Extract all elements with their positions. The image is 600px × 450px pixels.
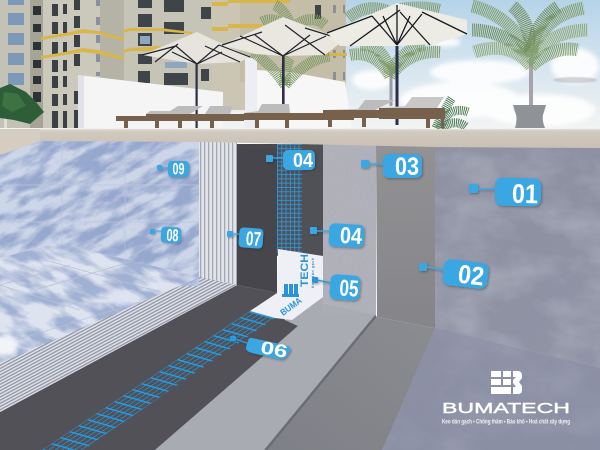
palm trees behind terrace [252,5,468,128]
callout 07: 07 [245,228,262,251]
umbrella left [142,32,250,128]
coping stone [0,129,600,155]
callout 09: 09 [172,160,184,178]
callout 05: 05 [339,274,360,302]
tile adhesive ribs: floor [0,277,237,412]
callout 01 [469,177,541,209]
white terrace walls [78,58,352,128]
callout 09 [157,160,189,178]
white membrane with brand print [250,249,323,320]
callout 01: 01 [512,179,538,209]
tile adhesive ribs: wall [199,142,237,285]
callout 05 [312,274,361,302]
callout 07 [227,227,264,251]
bush [436,98,468,128]
yellow balcony bands [41,0,347,60]
brand icon [282,284,299,297]
callout 08 [150,226,181,245]
logo icon [491,371,522,394]
callout 06 [230,336,290,362]
marble tile wall [0,141,199,286]
left tree [0,84,44,128]
umbrella middle [222,17,344,112]
callout 04 upper [266,150,315,172]
layer 01: concrete wall and floor [380,146,600,450]
white membrane with brand print: BUMA [278,295,304,318]
wall mesh [277,144,302,252]
Bumatech logo [442,371,570,426]
floor mesh [42,311,275,450]
callout 04 lower [310,222,365,249]
sun loungers [116,97,445,128]
umbrella right [327,3,467,125]
callout 06: 06 [259,337,289,362]
callout 02 [419,258,489,291]
logo wordmark: BUMATECH [442,400,570,417]
sky with clouds [0,0,600,130]
callout 08: 08 [166,226,179,245]
white membrane with brand print: TECH [299,254,311,287]
potted palm [472,6,588,128]
layer 04: grey textured coat [155,144,377,450]
layer 03: waterproofing coat [268,145,435,450]
layer 07: dark coat wall and floor [0,144,323,450]
callout 02: 02 [456,259,486,291]
white membrane with brand print: Keo dán gạch [311,258,315,288]
callout 03: 03 [395,153,419,181]
callout 04 upper: 04 [293,150,314,172]
marble tile floor [0,243,200,363]
umbrellas [142,3,467,128]
callout 04 lower: 04 [339,222,363,249]
building windows [8,0,345,128]
apartment buildings [0,0,347,128]
callout 03 [361,153,422,181]
